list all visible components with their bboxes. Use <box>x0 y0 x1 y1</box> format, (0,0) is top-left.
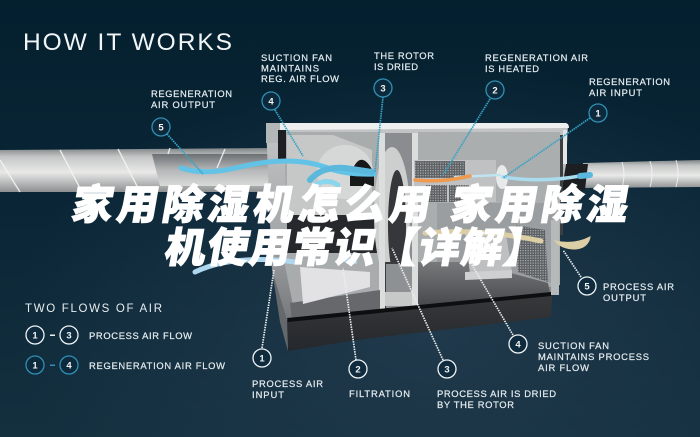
callout: process air is dried by the rotor: BY THE ROTOR <box>437 399 514 410</box>
callout: suction fan maintains reg. air flow <box>261 52 339 110</box>
callout: filtration <box>349 360 410 399</box>
gray filter right <box>515 225 548 282</box>
callout: process air output: OUTPUT <box>603 292 646 303</box>
filter panel <box>414 160 496 202</box>
callout: suction fan maintains reg. air flow: 4 <box>268 96 274 108</box>
black base stripe <box>287 292 551 322</box>
callout: regeneration air is heated: 2 <box>492 86 498 96</box>
callout: regeneration air input: 1 <box>595 108 601 120</box>
vertical posts <box>379 133 385 312</box>
callout: regeneration air input: REGENERATION <box>589 76 670 87</box>
inner suction fan <box>465 228 512 274</box>
callout: process air is dried by the rotor: PROCESS AIR IS DRIED <box>437 388 556 399</box>
overlay headline: 机使用常识【详解】 <box>161 225 549 271</box>
callout: the rotor is dried: 3 <box>380 84 386 94</box>
callout: regeneration air is heated: IS HEATED <box>485 63 539 74</box>
callout: process air output <box>578 277 674 303</box>
callout: process air is dried by the rotor: 3 <box>444 364 450 376</box>
fan disc <box>496 165 508 189</box>
legend row: regeneration air flow: REGENERATION AIR FLOW <box>89 360 225 371</box>
white filter box <box>300 267 370 304</box>
callout lines <box>167 97 590 360</box>
callout: regeneration air input: AIR INPUT <box>589 87 642 98</box>
floor <box>418 262 550 309</box>
cabinet body <box>266 124 568 320</box>
callout: regeneration air output <box>151 88 232 136</box>
callout: suction fan maintains reg. air flow: SUCTION FAN <box>261 52 332 63</box>
legend: two flows of air <box>25 303 225 374</box>
process air flow <box>195 232 590 272</box>
callout: regeneration air output: 5 <box>158 122 164 134</box>
callout: process air is dried by the rotor <box>437 360 556 410</box>
right spiral duct <box>563 160 700 192</box>
callout: regeneration air is heated: REGENERATION AIR <box>485 52 588 63</box>
legend row: process air flow: 1 <box>32 330 38 342</box>
callout: filtration: FILTRATION <box>349 388 410 399</box>
callout: process air input: 1 <box>259 354 265 364</box>
callout: suction fan maintains process air flow: SUCTION FAN <box>538 340 609 351</box>
legend row: regeneration air flow: 1 <box>32 360 38 372</box>
callout: regeneration air is heated <box>485 52 588 99</box>
callout: regeneration air output: REGENERATION <box>151 88 232 99</box>
legend row: regeneration air flow <box>26 356 225 374</box>
overlay headline: 家用除湿机怎么用 家用除湿 <box>68 182 632 228</box>
legend row: process air flow <box>26 326 192 344</box>
overlay headline <box>68 182 632 271</box>
callout: regeneration air output: AIR OUTPUT <box>151 99 215 110</box>
callout: filtration: 2 <box>355 364 361 376</box>
callout: process air output: 5 <box>584 282 590 292</box>
left chamber wall <box>285 132 380 316</box>
left side panel <box>270 215 288 351</box>
callout: suction fan maintains process air flow: 4 <box>515 340 521 350</box>
callout: suction fan maintains process air flow: AIR FLOW <box>538 362 589 373</box>
rotor chamber <box>384 133 414 309</box>
legend row: process air flow: 3 <box>66 330 72 342</box>
callout: the rotor is dried: IS DRIED <box>374 61 418 72</box>
callout: process air output: PROCESS AIR <box>603 281 674 292</box>
callout: suction fan maintains process air flow: MAINTAINS PROCESS <box>538 351 649 362</box>
title: how it works: HOW IT WORKS <box>23 29 232 56</box>
callout: the rotor is dried: THE ROTOR <box>374 50 434 61</box>
fan housing <box>317 145 373 199</box>
regeneration air flow <box>181 161 590 185</box>
callout: process air input: PROCESS AIR <box>252 378 323 389</box>
right wall edge <box>563 130 567 164</box>
callout: process air input: INPUT <box>252 389 284 400</box>
cabinet base <box>287 296 552 351</box>
callout: suction fan maintains reg. air flow: MAINTAINS <box>261 62 319 74</box>
legend row: regeneration air flow: 4 <box>66 360 72 372</box>
legend row: process air flow: PROCESS AIR FLOW <box>89 330 192 341</box>
dehumidifier cabinet <box>266 123 569 351</box>
callout: process air input <box>252 349 323 400</box>
callout: the rotor is dried <box>374 50 434 97</box>
legend: two flows of air: TWO FLOWS OF AIR <box>25 303 162 315</box>
top lid <box>266 123 569 130</box>
left spiral duct <box>0 135 287 197</box>
lower left dark void <box>287 215 380 253</box>
callout: suction fan maintains reg. air flow: REG. AIR FLOW <box>261 73 339 84</box>
right chamber back <box>418 132 560 309</box>
callout: suction fan maintains process air flow <box>509 335 649 373</box>
callout: regeneration air input <box>589 76 670 122</box>
